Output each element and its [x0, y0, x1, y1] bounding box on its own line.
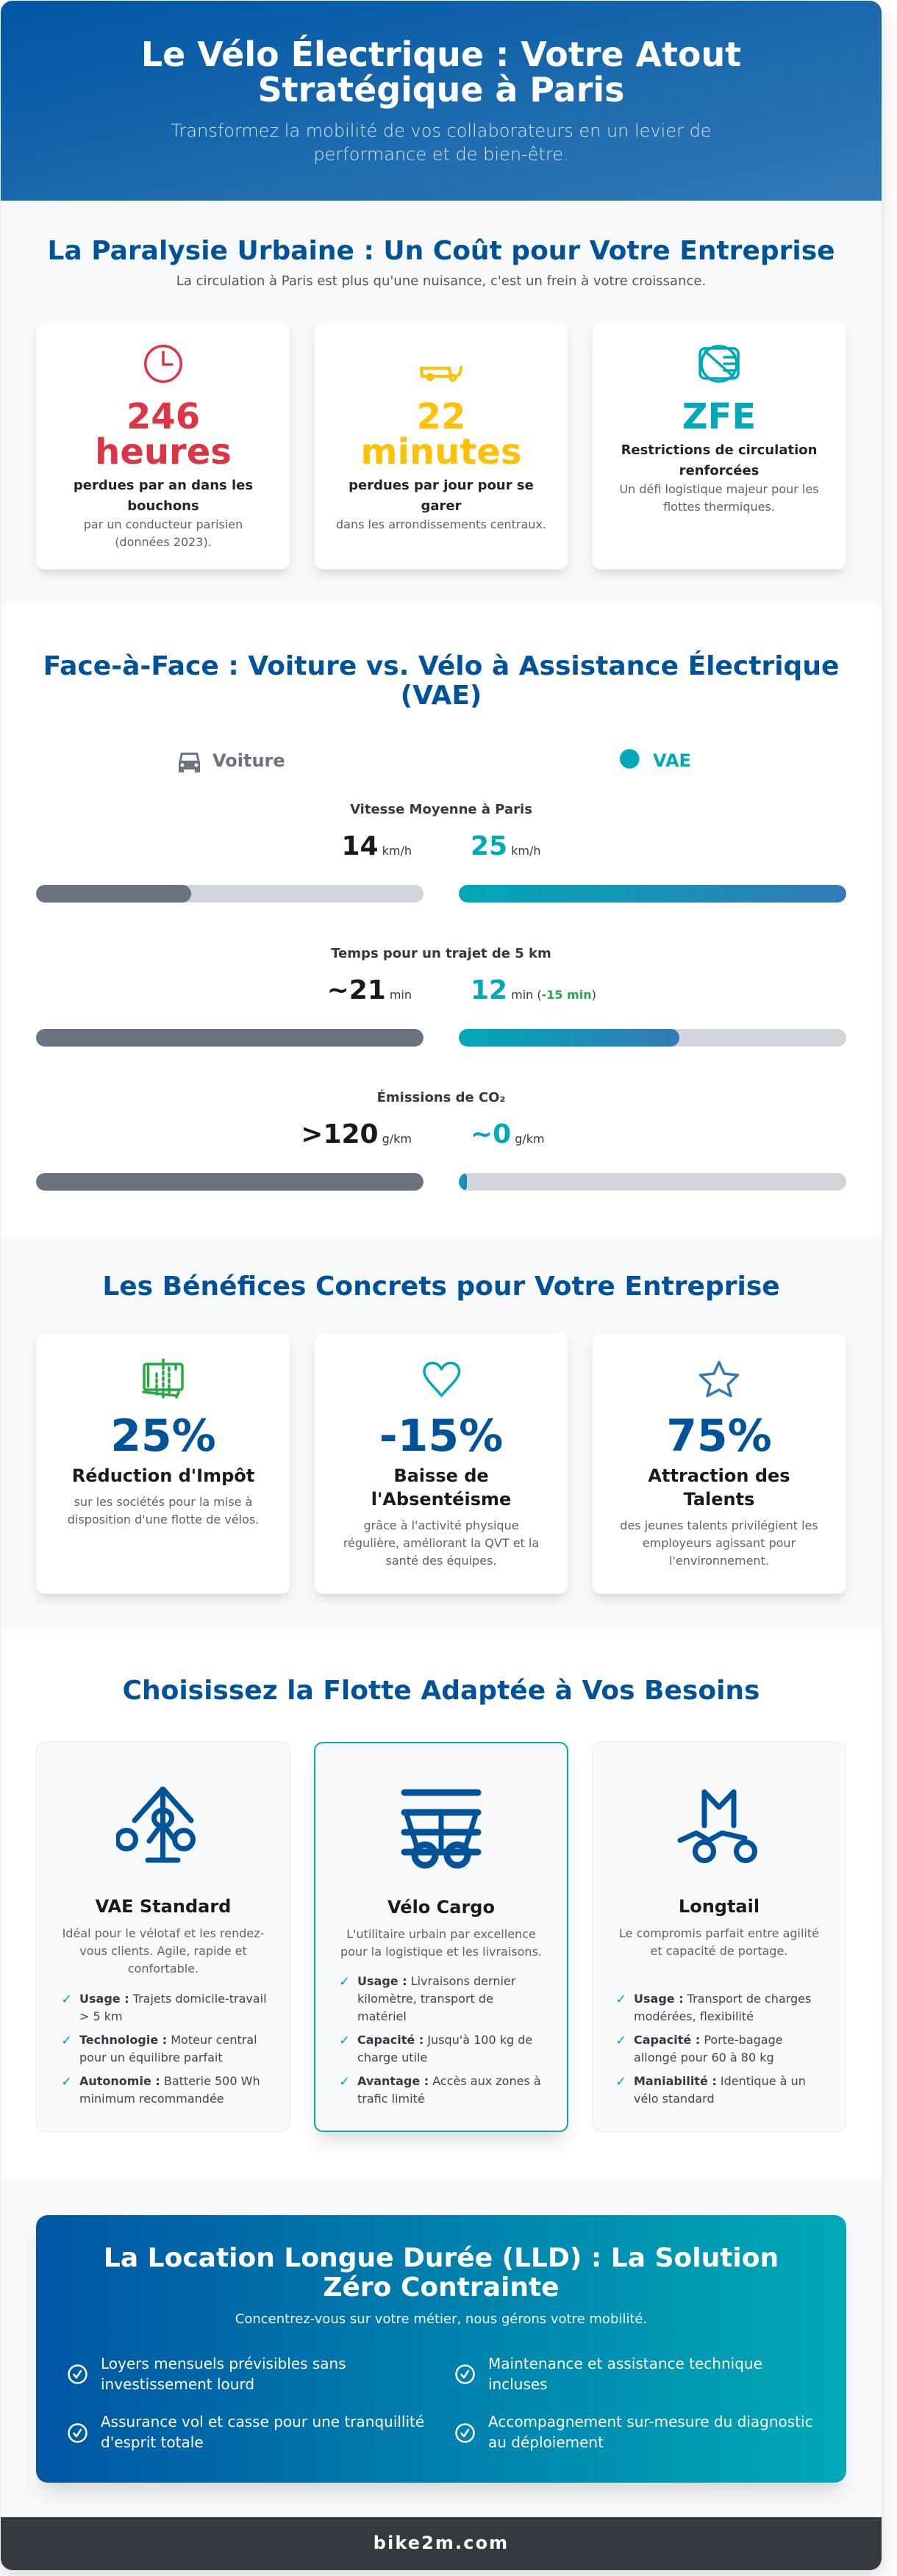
feature: advantage: [357, 2073, 541, 2108]
bar: car emissions: [36, 1173, 424, 1191]
icon: chart: [142, 1358, 184, 1399]
feature: capacity: charge utile: [357, 2051, 427, 2064]
feature: range: [61, 2074, 260, 2106]
stat note: [619, 482, 819, 513]
bar: bike time: [459, 1029, 846, 1047]
fleet description: et capacité de portage.: [650, 1943, 787, 1958]
benefit title: Attraction des: [648, 1465, 790, 1486]
section background: fleet: [1, 1629, 882, 2179]
benefit 2: incluses: [488, 2375, 548, 2393]
feature: usage: modérées, flexibilité: [634, 2009, 754, 2023]
benefit 2: [488, 2353, 762, 2394]
panel: absenteeism: [314, 1332, 568, 1594]
legend: VAE: [620, 749, 691, 771]
icon: longtail bike: [676, 1789, 765, 1867]
stat: 25%: 25%: [110, 1410, 216, 1462]
stat: 75%: 75%: [666, 1410, 772, 1462]
feature: capacity: [357, 2031, 532, 2067]
feature: handling: Maniabilité : Identique à un: [634, 2074, 806, 2088]
panel: hours lost: [36, 322, 290, 570]
feature: usage: [357, 1973, 515, 2026]
bar: bike speed: [459, 885, 846, 903]
benefit text: régulière, améliorant la QVT et la: [343, 1536, 539, 1550]
footer: [1, 2517, 882, 2570]
value: bike emissions: ~0 g/km: [471, 1119, 545, 1149]
stat label: Restrictions de circulation: [621, 442, 817, 458]
title: Stratégique à Paris: [258, 70, 624, 110]
benefit 3: d'esprit totale: [101, 2433, 204, 2451]
value: bike speed: 25 km/h: [471, 830, 541, 861]
feature list: ✓: [61, 2074, 72, 2089]
stat note: [84, 517, 243, 548]
feature list: [314, 1742, 568, 2132]
stat note: Un défi logistique majeur pour les: [619, 482, 819, 495]
subtitle: performance et de bien-être.: [313, 144, 569, 165]
feature: capacity: Capacité : Jusqu'à 100 kg de: [357, 2033, 532, 2046]
subtitle: [171, 121, 712, 165]
stat label: [349, 478, 534, 514]
heading: fleet: Choisissez la Flotte Adaptée à Vos Besoins: [123, 1676, 760, 1706]
value: car speed: 14 km/h: [341, 830, 412, 861]
stat label: perdues par an dans les: [74, 478, 253, 493]
section background: benefits: [1, 1237, 882, 1629]
legend text: VAE: [653, 750, 691, 771]
benefit text: [68, 1495, 259, 1526]
benefit title: Réduction d'Impôt: [72, 1465, 254, 1486]
title: Le Vélo Électrique : Votre Atout: [141, 35, 741, 74]
section background: long-term rental: [1, 2179, 882, 2517]
header band: [1, 1, 882, 201]
feature: range: minimum recommandée: [79, 2092, 224, 2106]
stat label: [74, 478, 253, 514]
feature: usage: [61, 1992, 267, 2023]
icon: restricted zone: [698, 345, 740, 383]
benefit text: grâce à l'activité physique: [363, 1518, 519, 1532]
icon: bike dot: [620, 749, 640, 769]
feature: capacity: Capacité : Porte-bagage: [634, 2033, 783, 2047]
label: emissions: Émissions de CO₂: [377, 1090, 505, 1105]
heading: long-term rental: Zéro Contrainte: [323, 2272, 560, 2302]
icon: cargo bike: [401, 1789, 482, 1870]
benefit text: employeurs agissant pour: [643, 1536, 796, 1550]
section background: urban paralysis: [1, 201, 882, 605]
bar: car time: [36, 1029, 424, 1047]
benefit text: des jeunes talents privilégient les: [620, 1518, 818, 1532]
feature: technology: [61, 2033, 257, 2064]
stat label: bouchons: [127, 498, 199, 514]
stat: -15%: -15%: [379, 1410, 503, 1462]
feature list: ✓: [61, 2033, 72, 2048]
benefit 4: au déploiement: [488, 2433, 604, 2451]
title: [141, 35, 741, 110]
feature list: ✓: [339, 2033, 350, 2048]
stat: 22 minutes: [361, 396, 521, 473]
panel: long-term rental: [36, 2215, 846, 2483]
icon: check 4: [455, 2422, 475, 2443]
heading: comparison: (VAE): [401, 681, 482, 710]
heading: comparison: [43, 650, 839, 710]
stat: 22 minutes: 22: [417, 396, 465, 437]
benefit 1: Loyers mensuels prévisibles sans: [101, 2355, 346, 2372]
panel: cargo bike: [314, 1742, 568, 2132]
fleet description: L'utilitaire urbain par excellence: [346, 1927, 536, 1940]
benefit text: l'environnement.: [669, 1554, 769, 1568]
heading: benefits: Les Bénéfices Concrets pour Votre Entreprise: [102, 1271, 780, 1301]
heading: long-term rental: La Location Longue Durée (LLD) : La Solution: [104, 2243, 779, 2272]
text: urban paralysis intro: La circulation à Paris est plus qu'une nuisance, c'est un frein à votre croissance.: [176, 273, 706, 289]
value: car time: ~21 min: [327, 975, 412, 1005]
stat note: par un conducteur parisien: [84, 517, 243, 531]
fleet description: Le compromis parfait entre agilité: [619, 1926, 819, 1940]
legend text: Voiture: [212, 750, 285, 771]
fleet description: Idéal pour le vélotaf et les rendez-: [62, 1926, 264, 1940]
stat: 246 heures: 246: [126, 396, 200, 437]
icon: check 2: [455, 2364, 475, 2384]
panel: longtail: [592, 1742, 846, 2132]
feature: usage: > 5 km: [79, 2009, 123, 2023]
icon: heart: [423, 1361, 460, 1397]
benefit title: [371, 1465, 511, 1510]
benefit 1: [101, 2353, 346, 2394]
fleet description: [592, 1924, 846, 1959]
feature: advantage: trafic limité: [357, 2092, 425, 2105]
feature: handling: vélo standard: [634, 2092, 715, 2106]
stat: ZFE: ZFE: [682, 396, 756, 437]
feature: technology: pour un équilibre parfait: [79, 2051, 223, 2064]
fleet title: Vélo Cargo: [387, 1897, 495, 1917]
fleet title: VAE Standard: [96, 1896, 231, 1917]
label: trip time: Temps pour un trajet de 5 km: [331, 946, 551, 961]
row: speed: [36, 802, 846, 903]
benefit title: [648, 1465, 790, 1510]
row: trip time: [36, 946, 846, 1047]
stat: 22 minutes: minutes: [361, 431, 521, 473]
benefit title: Talents: [684, 1489, 754, 1510]
panel: standard e-bike: [36, 1742, 290, 2132]
benefit 4: [488, 2411, 813, 2453]
legend: Voiture: [179, 750, 285, 772]
benefit title: l'Absentéisme: [371, 1489, 511, 1510]
feature: capacity: [634, 2031, 783, 2067]
icon: car: [179, 753, 200, 772]
benefit text: sur les sociétés pour la mise à: [74, 1495, 252, 1509]
panel: tax reduction: [36, 1332, 290, 1594]
feature list: [61, 1992, 267, 2106]
fleet description: [314, 1926, 568, 1961]
stat label: renforcées: [679, 463, 759, 478]
icon: standard bike: [116, 1787, 196, 1862]
heading: comparison: Face-à-Face : Voiture vs. Vélo à Assistance Électrique: [43, 651, 839, 681]
feature list: ✓: [339, 2074, 350, 2089]
feature list: ✓: [615, 2033, 626, 2048]
stat label: perdues par jour pour se: [349, 478, 534, 493]
panel: ZFE: [592, 322, 846, 570]
feature: range: Autonomie : Batterie 500 Wh: [79, 2074, 260, 2088]
icon: check 3: [68, 2422, 87, 2443]
feature list: ✓: [61, 1992, 72, 2007]
feature list: ✓: [615, 2074, 626, 2089]
fleet description: confortable.: [128, 1961, 199, 1976]
footer: bike2m.com: [374, 2533, 509, 2553]
bar: car speed: [36, 885, 424, 903]
section background: comparison: [1, 605, 882, 1237]
feature: advantage: Avantage : Accès aux zones à: [357, 2074, 541, 2087]
feature: capacity: allongé pour 60 à 80 kg: [634, 2051, 774, 2064]
benefit text: [343, 1518, 539, 1568]
stat note: flottes thermiques.: [663, 500, 775, 513]
feature: handling: [634, 2073, 806, 2108]
panel: talent attraction: [592, 1332, 846, 1594]
icon: star: [698, 1361, 740, 1398]
benefit 1: investissement lourd: [101, 2375, 254, 2393]
stat note: dans les arrondissements centraux.: [336, 517, 546, 531]
stat label: garer: [421, 498, 462, 514]
feature: usage: Usage : Transport de charges: [634, 1992, 811, 2006]
benefit 3: [101, 2411, 424, 2453]
feature: usage: matériel: [357, 2009, 407, 2023]
value: bike time: 12 min (-15 min): [471, 975, 596, 1005]
bar: bike emissions: [459, 1173, 846, 1191]
feature: usage: Usage : Trajets domicile-travail: [79, 1992, 267, 2006]
stat: 246 heures: [95, 396, 232, 473]
benefit 2: Maintenance et assistance technique: [488, 2355, 762, 2372]
heading: urban paralysis: La Paralysie Urbaine : Un Coût pour Votre Entreprise: [47, 235, 835, 266]
stat note: (données 2023).: [115, 535, 212, 548]
feature list: [592, 1742, 846, 2132]
benefit text: [620, 1518, 818, 1568]
fleet description: vous clients. Agile, rapide et: [79, 1943, 247, 1958]
feature: technology: Technologie : Moteur central: [79, 2033, 257, 2047]
stat: 246 heures: heures: [95, 431, 232, 473]
benefit 4: Accompagnement sur-mesure du diagnostic: [488, 2413, 813, 2430]
feature list: ✓: [339, 1974, 350, 1989]
stat label: [621, 442, 817, 478]
fleet description: pour la logistique et les livraisons.: [340, 1945, 542, 1958]
benefit 3: Assurance vol et casse pour une tranquillité: [101, 2413, 424, 2430]
icon: clock: [144, 345, 182, 383]
benefit text: santé des équipes.: [386, 1554, 496, 1568]
subtitle: Transformez la mobilité de vos collaborateurs en un levier de: [171, 121, 712, 141]
feature: usage: [634, 1990, 811, 2026]
fleet title: Longtail: [679, 1896, 760, 1917]
benefit text: disposition d'une flotte de vélos.: [68, 1513, 259, 1526]
icon: truck: [420, 366, 462, 382]
icon: check 1: [68, 2364, 87, 2384]
heading: long-term rental: [36, 2243, 846, 2302]
panel: parking time: [314, 322, 568, 570]
label: speed: Vitesse Moyenne à Paris: [350, 802, 532, 817]
feature list: ✓: [615, 1992, 626, 2007]
benefit title: Baisse de: [393, 1465, 489, 1486]
rental subtitle: Concentrez-vous sur votre métier, nous gérons votre mobilité.: [235, 2311, 647, 2327]
feature: usage: Usage : Livraisons dernier: [357, 1974, 515, 1987]
feature: usage: kilomètre, transport de: [357, 1992, 493, 2005]
value: car emissions: >120 g/km: [301, 1119, 412, 1149]
fleet description: [62, 1926, 264, 1976]
row: emissions: [36, 1089, 846, 1191]
